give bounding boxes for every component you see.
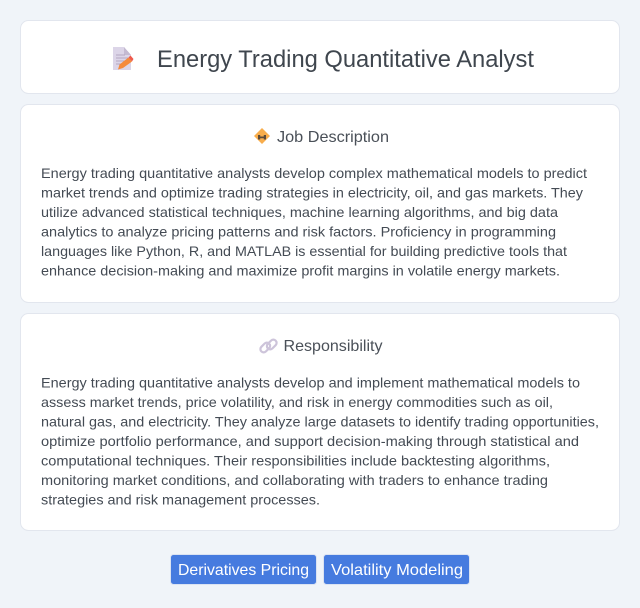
text block: responsibility: assess market trends, price volatility, and risk in energy commodities such as oil,	[41, 394, 553, 410]
icon: document with pencil	[113, 47, 134, 70]
icon: chain link	[259, 338, 278, 354]
panel: responsibility	[20, 314, 620, 530]
text block: responsibility: natural gas, and electricity. They analyze large datasets to identify trading opportunities,	[41, 414, 599, 430]
heading: responsibility: Responsibility	[284, 338, 382, 355]
text block: job description: analytics to analyze pricing patterns and risk factors. Proficiency in programming	[41, 224, 556, 240]
heading: job description: Job Description	[277, 129, 389, 146]
title: Energy Trading Quantitative Analyst	[157, 46, 534, 73]
text block: responsibility: Energy trading quantitative analysts develop and implement mathematical models to	[41, 374, 580, 390]
text block: job description: Energy trading quantitative analysts develop complex mathematical models to predict	[41, 165, 587, 181]
panel: title header	[20, 20, 620, 94]
text block: responsibility: strategies and risk management processes.	[41, 492, 320, 508]
tag: derivatives pricing	[170, 554, 316, 584]
text block: job description: market trends and optimize trading strategies in electricity, oil, and gas markets. They	[41, 184, 583, 200]
tag: derivatives pricing: Derivatives Pricing	[178, 562, 309, 579]
text block: job description: languages like Python, R, and MATLAB is essential for building predictive tools that	[41, 243, 567, 259]
tag: volatility modeling	[324, 554, 470, 584]
text block: job description: utilize advanced statistical techniques, machine learning algorithms, and big data	[41, 204, 558, 220]
text block: job description	[41, 165, 587, 278]
tag: volatility modeling: Volatility Modeling	[331, 562, 463, 579]
text block: responsibility: optimize portfolio performance, and support decision-making through statistical and	[41, 433, 579, 449]
text block: job description: enhance decision-making and maximize profit margins in volatile energy markets.	[41, 262, 560, 278]
text block: responsibility	[41, 374, 599, 508]
icon: orange diamond	[254, 128, 270, 144]
panel: job description	[20, 104, 620, 302]
text block: responsibility: computational techniques. Their responsibilities include backtesting algorithms,	[41, 452, 550, 468]
text block: responsibility: monitoring market conditions, and collaborating with traders to enhance trading	[41, 472, 548, 488]
